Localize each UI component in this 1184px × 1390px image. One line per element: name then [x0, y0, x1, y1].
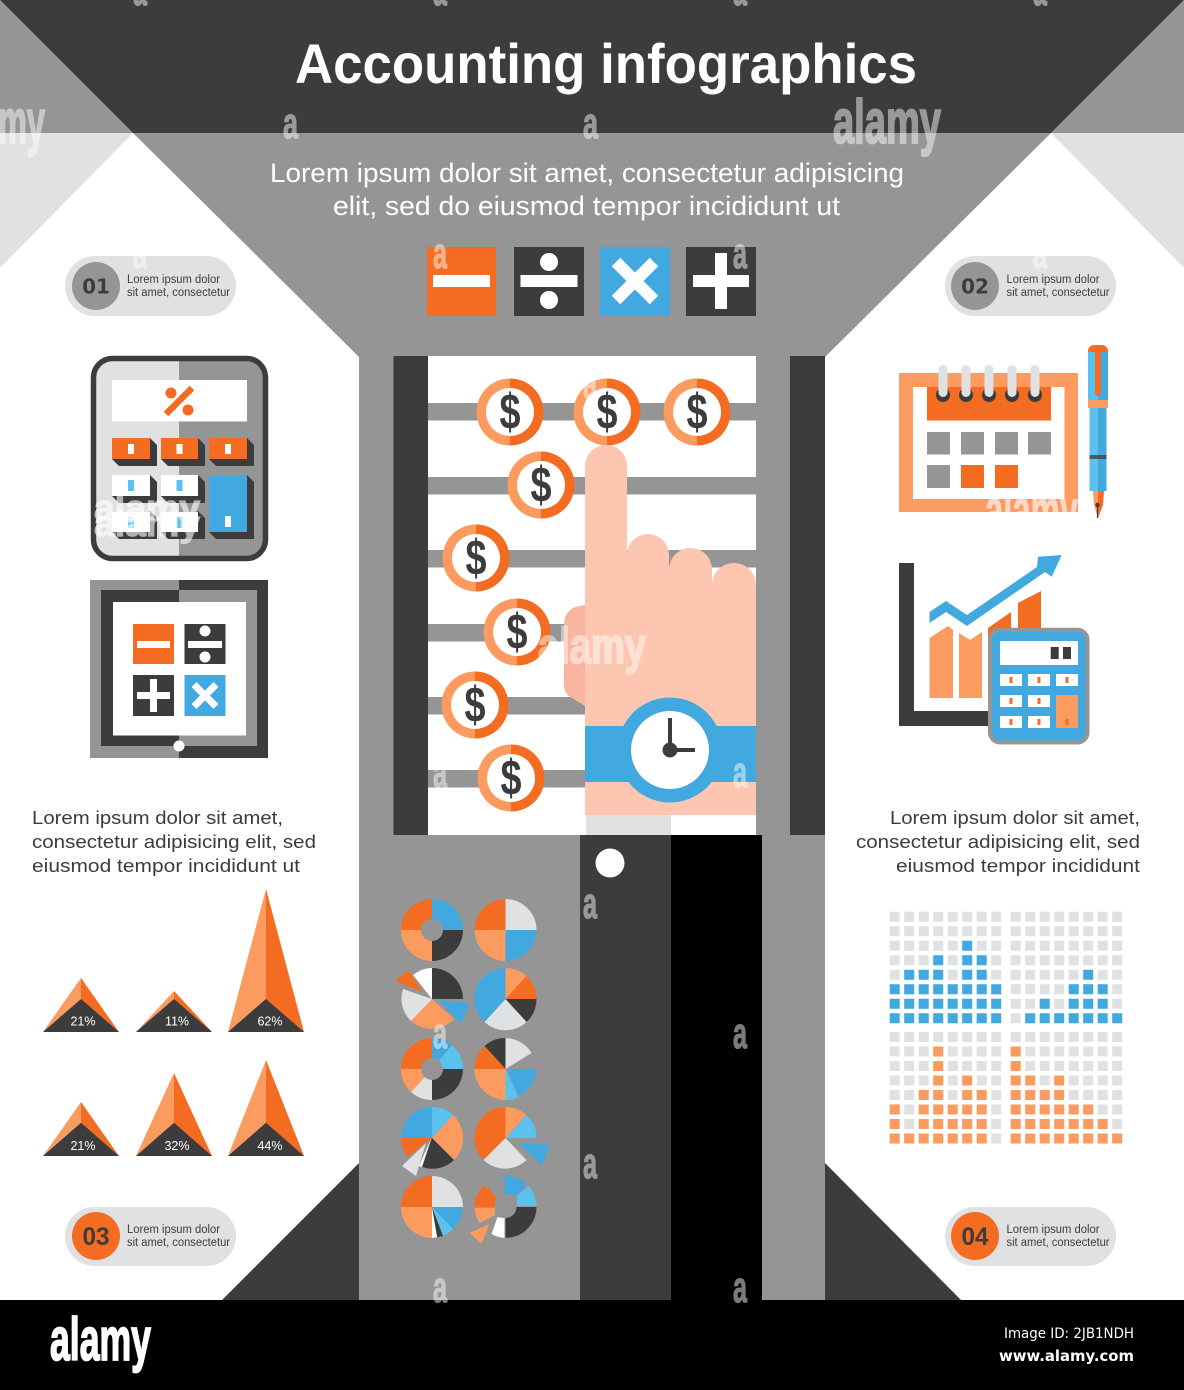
- pie 7: [401, 1107, 463, 1176]
- watermarks: a: [583, 99, 598, 148]
- watermarks: a: [283, 99, 298, 148]
- icon: growth chart with calculator: [899, 555, 1088, 742]
- coin 4: [508, 452, 574, 518]
- coin 3: $: [686, 384, 708, 440]
- date squares: [927, 432, 1051, 488]
- watermarks: a: [733, 1009, 747, 1058]
- coin 8: [478, 744, 544, 812]
- footer logo: alamy: [50, 1306, 151, 1373]
- triangle 62%: 62%: [257, 1014, 283, 1028]
- coin 3: [664, 378, 730, 446]
- watermarks: a: [583, 359, 597, 408]
- watermarks: alamy: [833, 88, 941, 157]
- small calculator: [990, 630, 1088, 742]
- badge 04: sit amet, consectetur: [1006, 1237, 1110, 1249]
- abacus rods: [428, 403, 756, 788]
- pie 1: [401, 899, 463, 961]
- right text block: [856, 808, 1140, 876]
- badge 03: Lorem ipsum dolor: [127, 1224, 220, 1236]
- badge 03: [65, 1207, 236, 1266]
- subtitle: Lorem ipsum dolor sit amet, consectetur adipisicing: [270, 158, 904, 188]
- icon: calendar: [899, 365, 1078, 512]
- coin 1: [476, 378, 544, 446]
- badge 01: Lorem ipsum dolor: [127, 274, 220, 286]
- left text block: consectetur adipisicing elit, sed: [32, 832, 316, 852]
- watermarks: a: [433, 1263, 447, 1312]
- dot matrix charts: [895, 912, 1117, 1144]
- watermarks: a: [583, 879, 597, 928]
- badge 02: 02: [961, 274, 989, 298]
- icon: multiply: [600, 247, 670, 316]
- right text block: consectetur adipisicing elit, sed: [856, 832, 1140, 852]
- pie 5: [401, 1038, 463, 1100]
- coin 7: $: [464, 677, 486, 733]
- arithmetic operator icons: [427, 247, 756, 316]
- watermarks: a: [433, 229, 447, 278]
- icon: minus: [427, 247, 496, 316]
- triangle 11%: 11%: [165, 1014, 189, 1028]
- left text block: Lorem ipsum dolor sit amet,: [32, 808, 283, 828]
- icon: plus: [686, 247, 756, 316]
- pie 2: [474, 899, 536, 961]
- triangle 21%: 21%: [70, 1014, 96, 1028]
- watermarks: a: [583, 1139, 597, 1188]
- watermarks: a: [433, 1009, 447, 1058]
- coin 6: $: [506, 604, 528, 660]
- hand with watch and sleeve: [564, 445, 762, 1300]
- triangle 44%: 44%: [257, 1139, 283, 1153]
- badge 01: 01: [82, 274, 110, 298]
- triangle 62%: [228, 889, 304, 1032]
- watermarks: alamy: [94, 503, 200, 544]
- percent sign: [166, 388, 194, 416]
- coin 1: $: [500, 384, 521, 440]
- watermarks: alamy: [538, 618, 646, 674]
- triangle 32%: 32%: [164, 1139, 190, 1153]
- wristwatch: [585, 698, 756, 802]
- coin 7: [442, 672, 508, 738]
- triangle 21% second row: [43, 1102, 119, 1156]
- calculator keys: [112, 438, 254, 539]
- pie 9: [401, 1176, 463, 1238]
- badge 01: [65, 256, 236, 316]
- watermarks: a: [133, 229, 147, 278]
- title: Accounting infographics: [295, 32, 917, 95]
- coin 5: $: [466, 530, 487, 586]
- badge 02: Lorem ipsum dolor: [1006, 274, 1100, 286]
- coin 6: [484, 598, 550, 666]
- coin 5: [442, 524, 510, 592]
- triangle 11%: [136, 991, 212, 1032]
- triangle 32%: [136, 1073, 212, 1156]
- triangle 21%: [43, 978, 119, 1032]
- badge 04: [945, 1207, 1116, 1266]
- watermarks: a: [733, 229, 747, 278]
- badge 04: Lorem ipsum dolor: [1006, 1224, 1100, 1236]
- watermarks: a: [733, 1263, 747, 1312]
- triangle 44%: [228, 1060, 304, 1156]
- watermarks: a: [433, 748, 447, 797]
- subtitle: elit, sed do eiusmod tempor incididunt ut: [333, 191, 841, 221]
- triangle 21% second row: 21%: [70, 1139, 96, 1153]
- badge 03: sit amet, consectetur: [127, 1237, 230, 1249]
- watermarks: my: [0, 88, 45, 157]
- watermarks: a: [733, 748, 747, 797]
- badge 03: 03: [82, 1223, 110, 1251]
- triangle chart: percentages: [43, 889, 304, 1156]
- badge 02: [945, 256, 1116, 316]
- coin 2: [574, 378, 640, 446]
- watermarks: alamy: [94, 487, 200, 528]
- orange dot bars left: [895, 1046, 982, 1144]
- right text block: eiusmod tempor incididunt: [896, 856, 1140, 876]
- pie 4: [474, 968, 537, 1030]
- watermarks: a: [1033, 229, 1047, 278]
- right text block: Lorem ipsum dolor sit amet,: [890, 808, 1140, 828]
- trend arrow: [930, 555, 1062, 626]
- pie 10: [470, 1176, 536, 1244]
- left text block: eiusmod tempor incididunt ut: [32, 856, 300, 876]
- pie 8: [474, 1107, 550, 1169]
- footer website: www.alamy.com: [999, 1347, 1134, 1365]
- bars: [930, 591, 1041, 698]
- hand: [585, 445, 756, 815]
- icon: tablet: [90, 580, 268, 758]
- icon: calculator: [94, 358, 266, 558]
- subtitle: [270, 158, 904, 221]
- grey dot grid: [895, 912, 1117, 1144]
- badge 02: sit amet, consectetur: [1006, 287, 1110, 299]
- pie chart grid: [395, 899, 550, 1244]
- badge 04: 04: [962, 1223, 989, 1251]
- left text block: [32, 808, 316, 876]
- spiral rings: [936, 365, 1042, 402]
- badge 01: sit amet, consectetur: [127, 287, 230, 299]
- pie 6: [474, 1038, 536, 1100]
- coin 8: $: [500, 750, 522, 806]
- icon: fountain pen: [1088, 345, 1108, 518]
- abacus: [394, 356, 825, 835]
- icon: divide: [514, 247, 584, 316]
- blue dot bars right: [1030, 970, 1117, 1023]
- shirt cuff: [586, 815, 671, 835]
- blue dot bars left: [895, 941, 996, 1023]
- footer image id: Image ID: 2JB1NDH: [1004, 1326, 1134, 1342]
- coin 4: $: [530, 457, 552, 513]
- watermarks: alamy: [985, 477, 1078, 544]
- coin 2: $: [596, 384, 618, 440]
- footer bar: [0, 1300, 1184, 1390]
- sleeve: [580, 835, 762, 1300]
- orange dot bars right: [1016, 1046, 1117, 1144]
- thumb: [564, 605, 585, 706]
- pie 3: [395, 968, 469, 1029]
